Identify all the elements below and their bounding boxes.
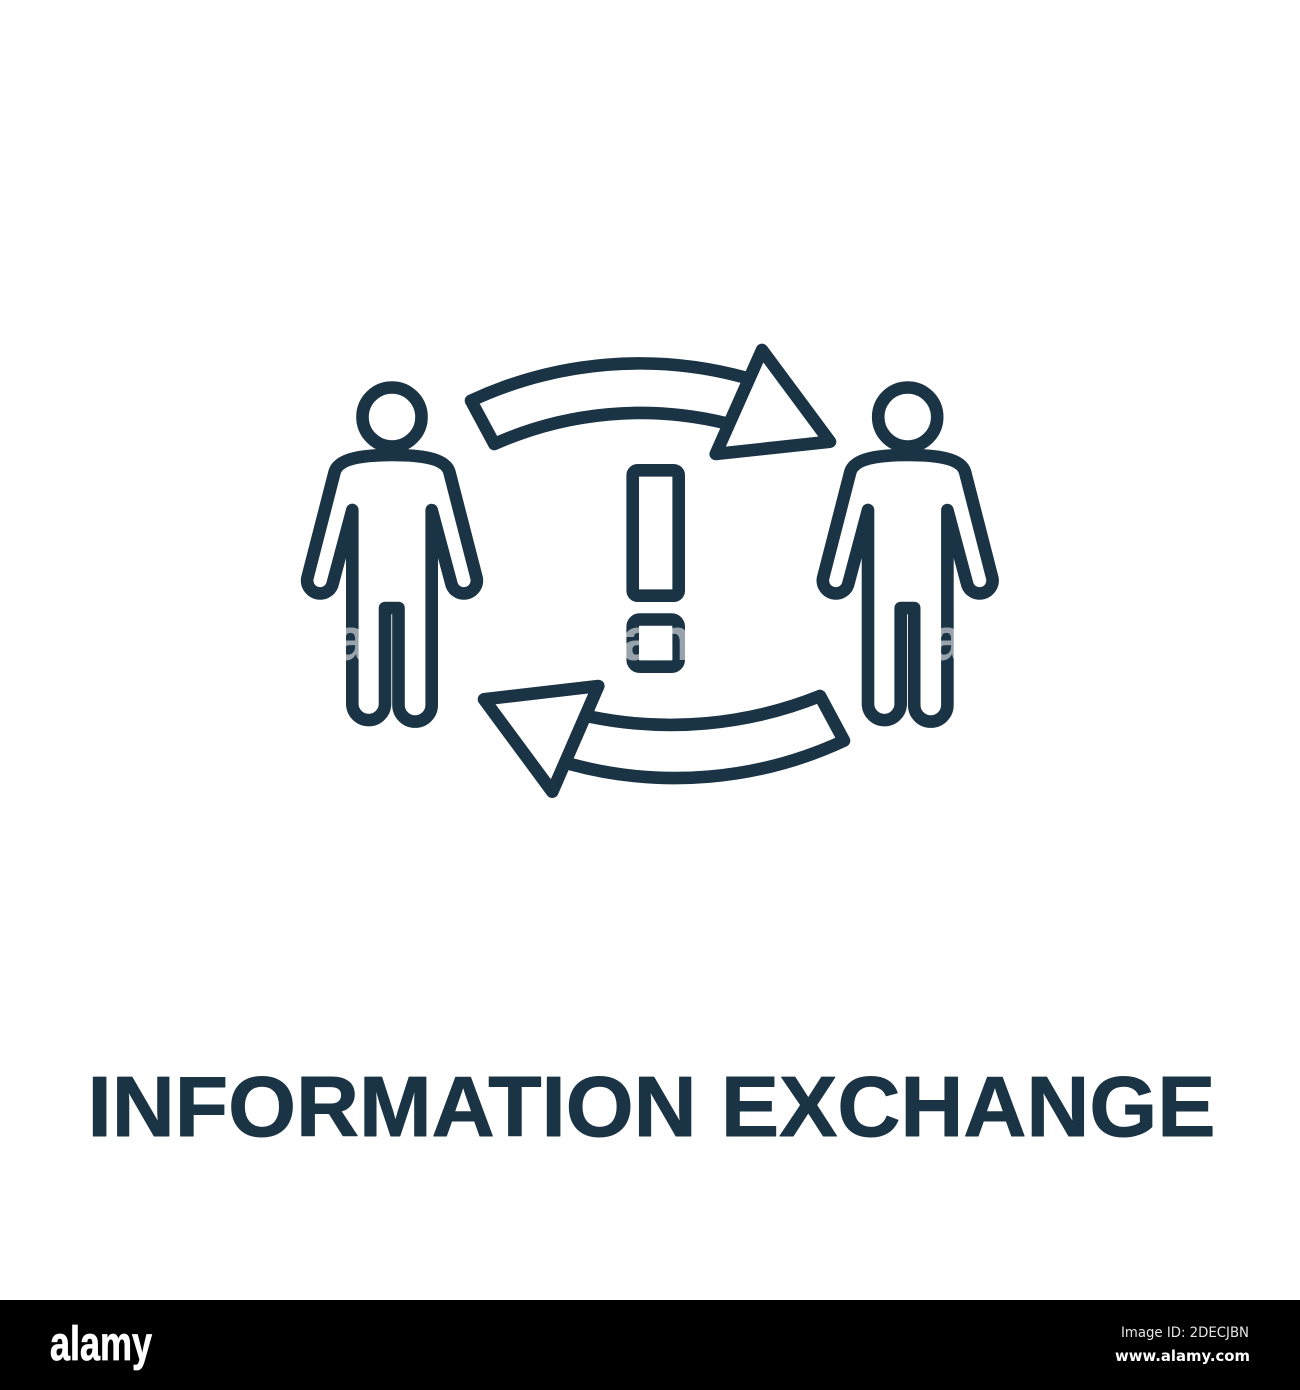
image id: Image ID: 2DECJBN — [1121, 1325, 1249, 1341]
watermark fragments: a — [334, 606, 368, 673]
watermark fragments: a — [930, 606, 964, 673]
icon: information exchange — [307, 350, 993, 792]
watermark fragments — [334, 606, 964, 673]
title: INFORMATION EXCHANGE — [88, 1060, 1216, 1155]
watermark fragments: n — [655, 606, 692, 673]
icon: left person — [307, 388, 477, 722]
footer bar — [0, 1300, 1300, 1390]
arrow: upper, pointing right — [471, 350, 830, 454]
arrow: lower, pointing left — [484, 686, 844, 792]
icon: right person — [823, 388, 993, 722]
website: www.alamy.com — [1115, 1347, 1250, 1365]
icon: exclamation mark — [633, 470, 679, 667]
footer logo: alamy — [50, 1318, 152, 1371]
watermark fragments: a — [622, 606, 656, 673]
